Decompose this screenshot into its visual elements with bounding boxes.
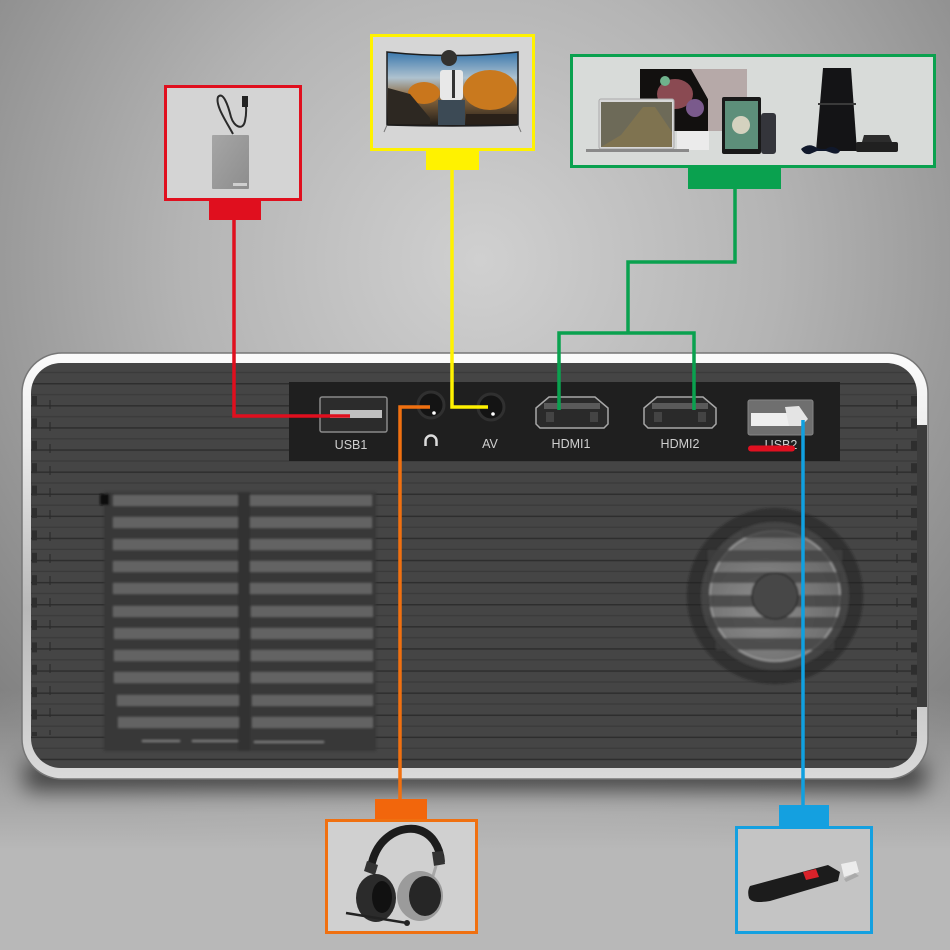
right side dark strip (917, 425, 927, 707)
HDMI2 port: HDMI2 (661, 437, 699, 451)
icon: headset (346, 829, 445, 926)
icon: phone (761, 113, 776, 154)
HDMI1 port (536, 397, 608, 451)
USB1 port: USB1 (335, 438, 367, 452)
AV jack: AV (482, 437, 499, 451)
connector: HDMI green (559, 189, 735, 410)
icon: hard disk with cable (212, 96, 249, 189)
side pegs (32, 396, 917, 736)
USB1 port (320, 397, 387, 452)
AV jack (478, 394, 504, 451)
connector: USB1 red (234, 220, 350, 416)
USB2 port (748, 400, 813, 452)
connector: headphone orange (400, 407, 430, 799)
HDMI2 port (644, 397, 716, 451)
connector: USB2 blue (801, 420, 805, 805)
HDMI1 port: HDMI1 (552, 437, 590, 451)
panel: USB flash drive (736, 805, 872, 932)
headphone icon (426, 436, 436, 446)
panel: headphones (326, 799, 476, 932)
icon: game console (801, 68, 898, 154)
cooling vent (100, 492, 376, 751)
ribbed dark face (31, 363, 917, 768)
icon: tablet (722, 97, 761, 154)
speaker (687, 508, 863, 684)
projector body (22, 353, 928, 779)
connector: AV yellow (452, 170, 488, 407)
game character (438, 50, 465, 125)
panel: HDMI devices (572, 56, 934, 189)
panel: TV (372, 36, 534, 170)
headphone jack (418, 392, 444, 446)
panel: USB drive and hard disk (166, 86, 300, 220)
icon: desktop monitor (640, 69, 747, 150)
USB2 red mark (748, 446, 795, 452)
icon: curved television (384, 50, 521, 132)
icon: flash drive (748, 861, 859, 902)
silver body rim (22, 353, 928, 779)
USB2 port: USB2 (765, 438, 797, 452)
port panel (289, 382, 840, 461)
icon: laptop (586, 99, 689, 152)
